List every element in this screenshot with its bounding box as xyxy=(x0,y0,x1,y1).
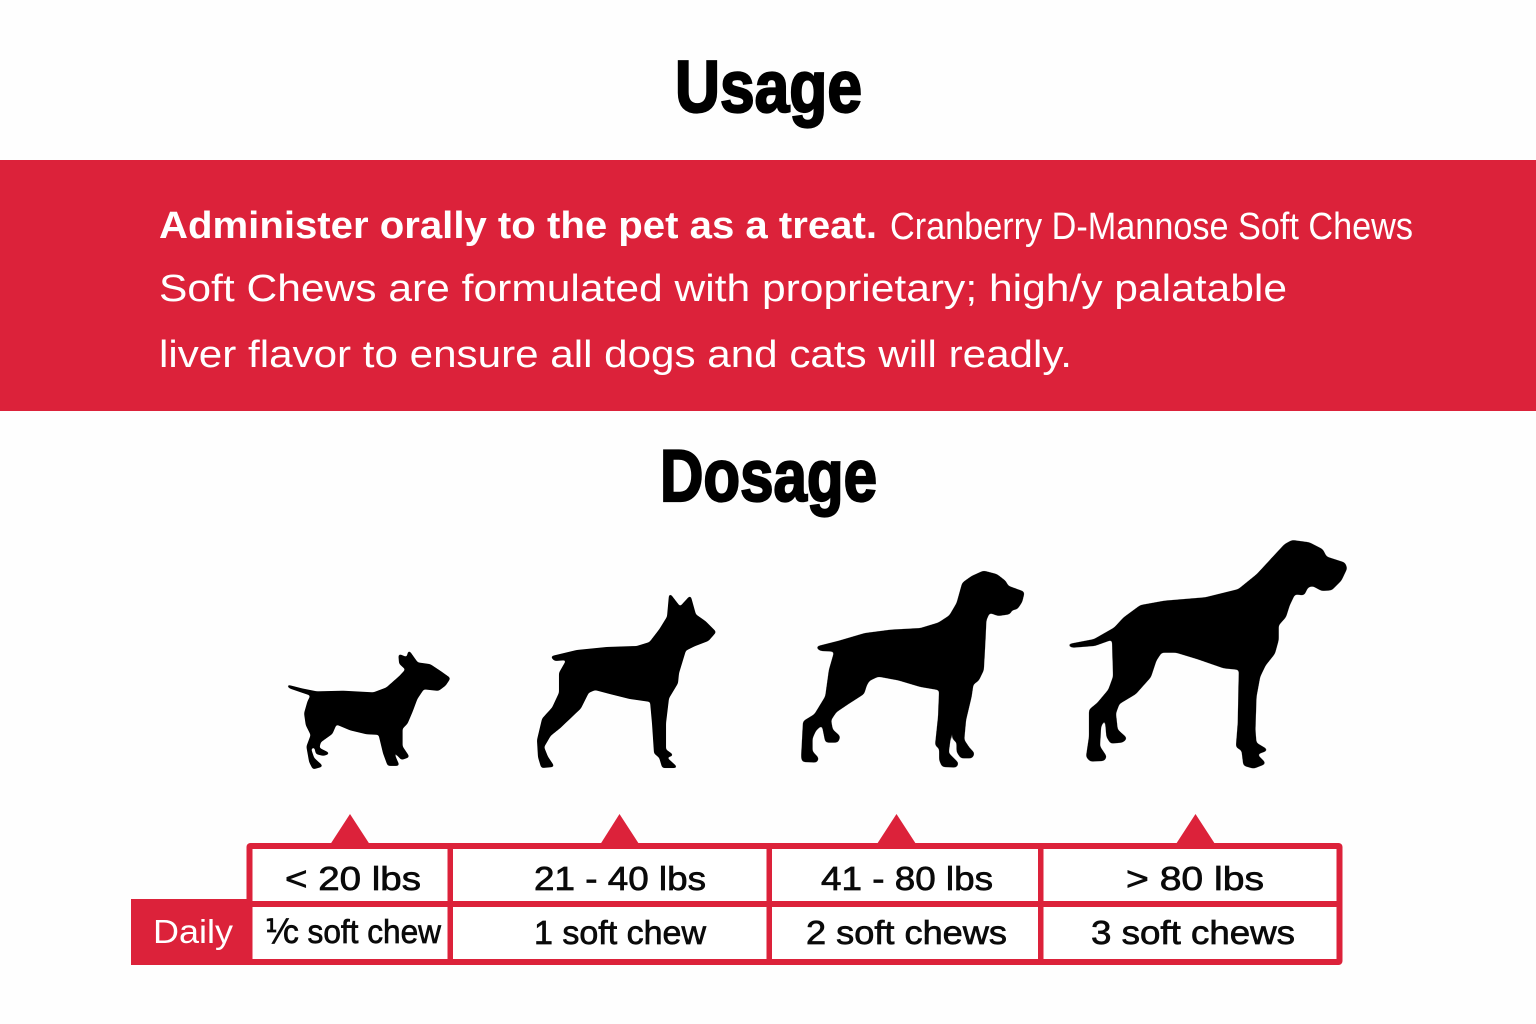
marker: triangle under medium dog xyxy=(600,814,639,844)
icon: medium dog silhouette xyxy=(538,595,715,767)
text: bold usage lead: Administer orally to the pet as a treat. xyxy=(159,205,877,247)
title: Usage: Usage xyxy=(675,47,862,128)
dosage table xyxy=(131,814,1342,965)
label: Daily row header xyxy=(131,899,253,965)
cell: 3 soft chews: 3 soft chews xyxy=(1091,914,1295,951)
marker: triangle under large dog xyxy=(877,814,916,844)
cell: half soft chew: ⅟c soft chew xyxy=(265,913,441,950)
marker: triangle under extra large dog xyxy=(1176,814,1215,844)
cell: 2 soft chews: 2 soft chews xyxy=(806,914,1007,951)
cell: weight under 20 lbs: < 20 lbs xyxy=(285,860,421,897)
text: product name line: Cranberry D-Mannose Soft Chews xyxy=(890,206,1413,248)
label: Daily row header: Daily xyxy=(153,913,234,950)
cell: 1 soft chew: 1 soft chew xyxy=(534,914,706,951)
text: second line: Soft Chews are formulated with proprietary; high/y palatable xyxy=(159,268,1287,310)
title: Dosage: Dosage xyxy=(660,436,877,517)
cell: weight over 80 lbs: > 80 lbs xyxy=(1126,860,1264,897)
icon: large dog silhouette xyxy=(802,572,1023,767)
cell: weight 21-40 lbs: 21 - 40 lbs xyxy=(534,860,706,897)
panel: usage instructions banner xyxy=(0,160,1536,411)
icon: small dog silhouette xyxy=(288,652,449,768)
text: third line: liver flavor to ensure all dogs and cats will readly. xyxy=(159,334,1072,376)
marker: triangle under small dog xyxy=(330,814,370,844)
table grid xyxy=(246,843,1342,965)
cell: weight 41-80 lbs: 41 - 80 lbs xyxy=(821,860,993,897)
icon: extra large dog silhouette xyxy=(1069,541,1346,768)
